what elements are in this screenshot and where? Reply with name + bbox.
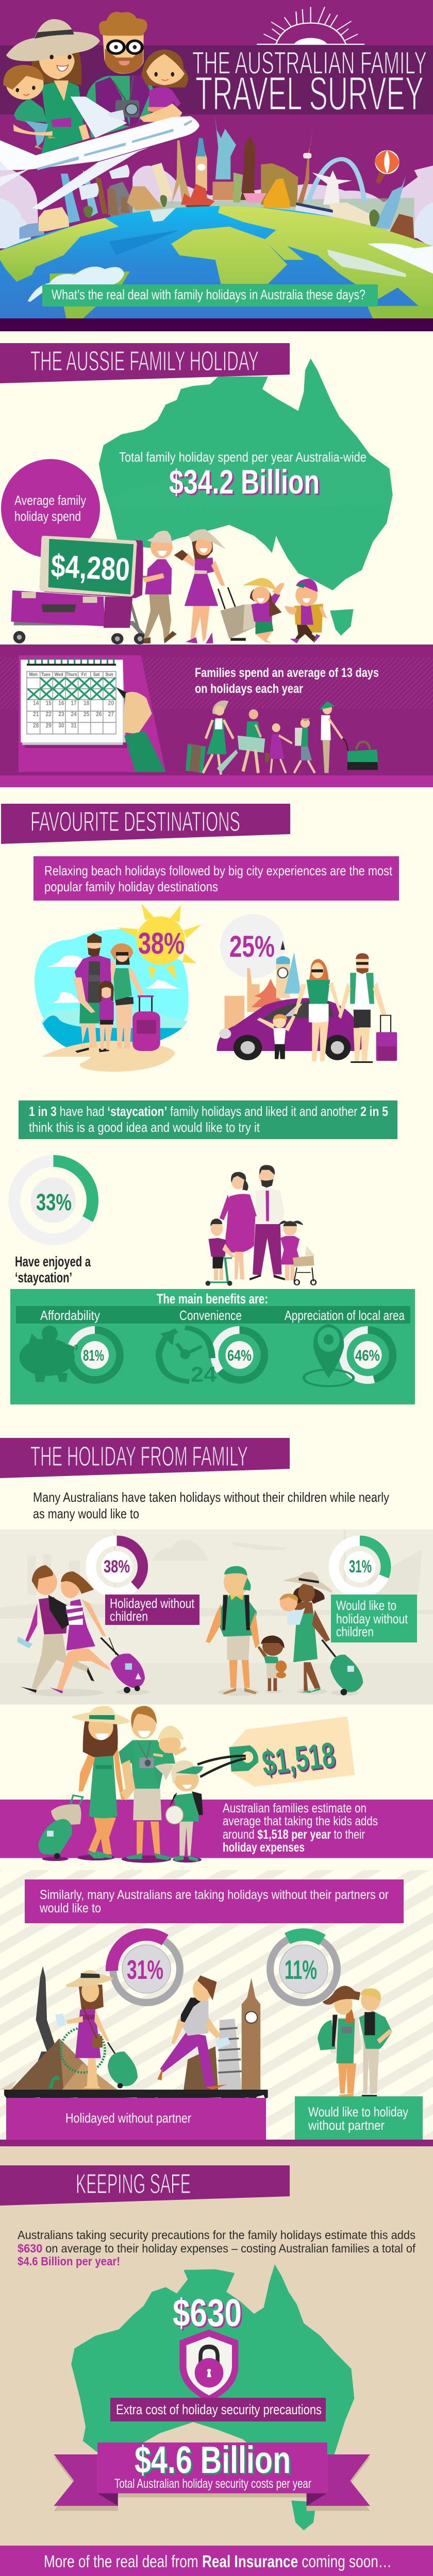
label strip: Affordability [40, 1308, 100, 1323]
boy [3, 65, 57, 149]
calendar labels: 15 [46, 700, 52, 706]
donut: local area 46%: 46% [355, 1347, 380, 1364]
heading: THE HOLIDAY FROM FAMILY [30, 1441, 248, 1472]
stat: 38%: 38% [138, 927, 185, 960]
intro box: popular family holiday destinations [44, 879, 218, 894]
mum with luggage [174, 529, 257, 643]
baby [153, 1725, 187, 1781]
dad with backpack [206, 1566, 260, 1694]
stat: $630: $630 [173, 2291, 242, 2334]
donut: convenience 64% [214, 1330, 264, 1380]
dad with trolley [142, 531, 177, 643]
text: kids add $1,518: average that taking the kids adds [223, 1814, 378, 1828]
label: would like to holiday without children: children [336, 1624, 374, 1639]
intro text: $4.6 Billion per year! [18, 2255, 120, 2268]
father [256, 1188, 285, 1228]
calendar labels: 23 [58, 711, 64, 718]
label: have enjoyed a staycation [15, 1253, 91, 1285]
car [217, 998, 362, 1060]
ribbon: $4.6 Billion [54, 2438, 370, 2511]
illustration: family at home [206, 1165, 316, 1286]
donut: convenience 64%: 64% [227, 1347, 252, 1364]
moai and Pisa [184, 2019, 242, 2090]
donut chart: 38% holidayed without children: 38% [104, 1557, 130, 1577]
illustration: city holiday [217, 914, 397, 1063]
stat: $630: $630 [174, 2293, 243, 2336]
price: $4,280: $4,280 [50, 548, 131, 588]
donut: affordability 81% [70, 1330, 120, 1380]
label: would like to holiday without children: Would like to [336, 1598, 396, 1613]
mum [6, 19, 100, 154]
donut chart: 31% holidayed without partner: 31% [127, 1955, 163, 1985]
landmarks [19, 115, 414, 239]
title [192, 45, 427, 120]
label: holidayed without children: Holidayed without [110, 1596, 195, 1611]
heading: FAVOURITE DESTINATIONS [30, 806, 240, 837]
clouds [0, 165, 433, 248]
illustration: suitcase, trolley and travelling family [11, 529, 327, 645]
ground [4, 2090, 268, 2106]
intro box: partners: Similarly, many Australians are taking holidays without their partners or [40, 1888, 389, 1902]
airplane [0, 96, 199, 210]
intro box: partners: would like to [39, 1901, 101, 1916]
donut chart: 33%: 33% [36, 1189, 72, 1215]
unhappy couple [318, 1986, 393, 2099]
calendar labels: Mon [29, 671, 38, 677]
calendar labels: 25 [84, 711, 89, 718]
text: kids add $1,518: around $1,518 per year to their [223, 1827, 365, 1842]
green crosses on calendar [28, 678, 115, 700]
calendar labels: Sun [106, 671, 113, 677]
mum [72, 1706, 130, 1858]
heading [1, 804, 290, 844]
girl [140, 49, 188, 122]
calendar labels: 22 [46, 711, 52, 718]
boy [285, 579, 327, 643]
map of Australia [71, 2264, 354, 2530]
donut chart: 11% would like to [257, 1922, 351, 2016]
calendar labels: 24 [71, 711, 77, 718]
calendar labels: 20 [108, 700, 114, 706]
calendar labels: Wed [55, 671, 63, 677]
calendar labels: 16 [58, 700, 64, 706]
calendar labels: 17 [71, 700, 77, 706]
price: $1,518: $1,518 [261, 1736, 339, 1784]
text: kids add $1,518 [223, 1801, 378, 1855]
suitcase [376, 1015, 397, 1061]
panel heading: The main benefits are: [157, 1291, 268, 1307]
icon: piggy bank [19, 1326, 77, 1382]
family portrait [3, 12, 188, 154]
intro box [34, 856, 399, 901]
calendar labels [29, 671, 114, 729]
label: would like to holiday without partner: without partner [308, 2117, 385, 2133]
donut: affordability 81%: 81% [83, 1347, 104, 1364]
label: holidayed without children: children [110, 1608, 148, 1624]
label: holidayed without partner: Holidayed without partner [65, 2110, 191, 2126]
label: holidayed without partner [6, 2098, 266, 2140]
text: families spend 13 days: Families spend an average of 13 days [195, 666, 379, 680]
staycation box: 1 in 3 have had ‘staycation’ family holidays and liked it and another 2 in 5 [29, 1104, 388, 1119]
hand with marker [116, 687, 165, 772]
section: the holiday from family [0, 1438, 433, 2146]
map of Australia [99, 359, 393, 636]
woman [294, 959, 342, 1061]
callout circle: average family holiday spend: holiday spend [14, 509, 81, 524]
intro text: Australians taking security precautions for the family holidays estimate this adds [18, 2228, 415, 2242]
child [257, 1014, 295, 1059]
section: keeping safe [0, 2146, 433, 2546]
price: $1,518: $1,518 [260, 1735, 337, 1783]
icon: sun [118, 903, 202, 980]
ribbon: $4.6 Billion: $4.6 Billion [135, 2438, 291, 2481]
intro text: as many would like to [33, 1506, 139, 1521]
closing banner: More of the real deal from Real Insurance coming soon… [44, 2552, 392, 2571]
heading [0, 2165, 290, 2206]
label: holidayed without children [105, 1595, 199, 1625]
text: families spend 13 days [195, 666, 379, 696]
mum [110, 943, 145, 1049]
calendar labels: 21 [33, 711, 39, 718]
airport scene [0, 1529, 433, 1704]
calendar and hand illustration [19, 655, 165, 772]
label strip: Appreciation of local area [285, 1308, 405, 1323]
intro text [18, 2228, 416, 2268]
donut chart: 31% would like to: 31% [349, 1557, 372, 1577]
Eiffel Tower [12, 1966, 58, 2088]
illustration: family walking with luggage [186, 701, 378, 774]
calendar labels: Tues [41, 671, 51, 677]
heading: THE AUSSIE FAMILY HOLIDAY [30, 346, 259, 377]
stat: total family holiday spend: $34.2 Billion [169, 463, 320, 501]
icon: hot air balloon [375, 150, 399, 184]
ribbon caption: Total Australian holiday security costs per year [114, 2477, 311, 2491]
panel: cost of taking the kids [0, 1706, 433, 1863]
mother [225, 1194, 256, 1253]
luggage [39, 1795, 83, 1859]
dad [86, 12, 157, 138]
illustration: family of four [39, 1706, 203, 1863]
man [73, 933, 112, 1053]
woman traveller [55, 1970, 138, 2088]
faint background [0, 1529, 433, 1630]
stat: total family holiday spend [119, 449, 367, 502]
closing banner [0, 2546, 433, 2576]
calendar labels: 28 [33, 722, 39, 729]
suitcase [132, 996, 160, 1051]
hero illustration: sky, landmarks, globe, plane and family [0, 0, 433, 318]
price: $1,518 [260, 1735, 339, 1784]
heading [0, 343, 290, 383]
mother with baby [279, 1572, 363, 1696]
girl [99, 981, 114, 1050]
label strip [16, 1306, 410, 1324]
intro text [33, 1489, 389, 1521]
callout circle: average family holiday spend [1, 459, 100, 558]
illustration: solo travellers and landmarks [0, 1966, 393, 2106]
couple with suitcase [17, 1565, 145, 1693]
label: extra cost of security precautions: Extra cost of holiday security precautions [116, 2402, 322, 2417]
label: would like to holiday without children: holiday without [336, 1611, 408, 1626]
calendar labels: 18 [84, 700, 89, 706]
stat: total family holiday spend: $34.2 Billion [171, 464, 321, 502]
heading [0, 1438, 290, 1478]
text: kids add $1,518: Australian families estimate on [223, 1801, 367, 1816]
donut chart: 31% holidayed without partner [110, 1933, 182, 2005]
callout circle: average family holiday spend: Average family [14, 493, 86, 508]
donut chart: 33% [14, 1161, 93, 1240]
label: would like to holiday without children [331, 1595, 417, 1642]
icon: 24 hour clock [159, 1328, 217, 1386]
donut: local area 46% [343, 1330, 393, 1380]
calendar labels: 31 [71, 722, 77, 729]
boy and scooter [208, 1238, 226, 1257]
stat: 25%: 25% [229, 930, 275, 963]
label: would like to holiday without partner [295, 2096, 423, 2140]
calendar labels: 29 [46, 722, 52, 729]
calendar labels: Thurs [66, 671, 77, 677]
intro text: $630 on average to their holiday expenses – costing Australian families a total of [18, 2242, 416, 2255]
staycation box: think this is a good idea and would like to try it [29, 1120, 260, 1135]
donut chart: 31% would like to [334, 1540, 386, 1593]
man [338, 953, 387, 1063]
ribbon figure: $4.6 Billion [136, 2440, 292, 2483]
heading: KEEPING SAFE [76, 2168, 191, 2199]
text: families spend 13 days: on holidays each year [195, 682, 303, 696]
label: would like to holiday without partner: Would like to holiday [308, 2104, 408, 2120]
suitcase with price [11, 536, 152, 645]
hero banner [0, 0, 433, 331]
toddler with teddy [257, 1635, 287, 1691]
label: have enjoyed a staycation: Have enjoyed a [15, 1253, 91, 1269]
calendar labels: 27 [108, 711, 114, 718]
label strip: Convenience [179, 1308, 242, 1323]
dad [119, 1706, 171, 1860]
text: kids add $1,518: holiday expenses [223, 1840, 305, 1855]
icon: map pin [304, 1324, 354, 1386]
label: extra cost of security precautions [110, 2398, 326, 2421]
ferris wheel [61, 2028, 105, 2073]
section: the Aussie family holiday [0, 343, 433, 787]
girl and pram [280, 1236, 301, 1264]
shadows [29, 1688, 359, 1697]
intro box: partners [25, 1879, 404, 1923]
city landmarks [225, 941, 301, 1029]
girl [242, 578, 285, 643]
calendar labels: 14 [33, 700, 39, 706]
globe [0, 202, 433, 318]
stat: total family holiday spend: Total family holiday spend per year Australia-wide [119, 449, 367, 465]
calendar labels: Fri [81, 671, 87, 677]
illustration: beach holiday [35, 903, 202, 1072]
panel: 13 days on holiday [0, 645, 433, 787]
striped background [0, 1870, 433, 2140]
label: have enjoyed a staycation: ‘staycation’ [15, 1269, 72, 1285]
staycation box [19, 1100, 397, 1139]
donut chart: 11% would like to: 11% [285, 1955, 317, 1985]
donut chart: 38% holidayed without children [91, 1540, 143, 1593]
calendar labels: Sat [93, 671, 99, 677]
tagline [42, 284, 378, 307]
pyramids [0, 2039, 118, 2090]
boy [165, 1760, 203, 1862]
calendar labels: 26 [96, 711, 102, 718]
calendar labels: 30 [58, 722, 64, 729]
Big Ben [242, 1978, 260, 2090]
icon: 24 hour clock: 24 [191, 1362, 217, 1386]
icon: sunrise [257, 7, 364, 45]
icon: security shield and padlock [179, 2330, 238, 2402]
section: favourite destinations [1, 804, 415, 1404]
price tag [197, 1717, 355, 1787]
panel: main benefits [10, 1289, 415, 1404]
man traveller [157, 1975, 230, 2090]
